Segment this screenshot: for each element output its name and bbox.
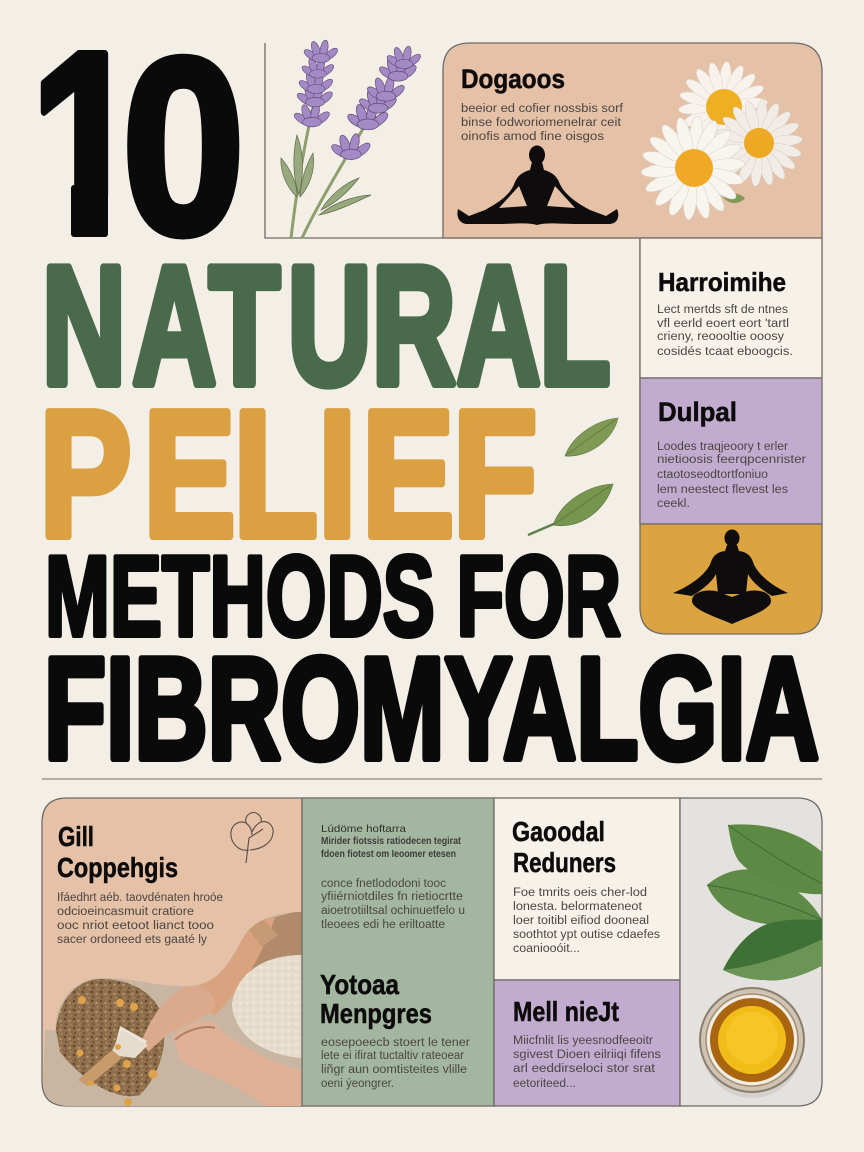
panel text: Miicfnlit lis yeesnodfeeoitr	[513, 1035, 653, 1047]
card heading: Dogaoos	[461, 64, 565, 94]
panel text	[513, 887, 660, 955]
panel text: odcioeincasmuit cratiore	[57, 906, 194, 918]
photo: hands with herbs and heat pack	[42, 905, 304, 1110]
panel text: eetoriteed...	[513, 1078, 576, 1090]
panel heading: Yotoaa	[320, 969, 399, 1000]
icon: leaf outline	[231, 812, 273, 863]
panel text: nietioosis feerqpcenrister	[657, 454, 806, 466]
icon: seated stretch silhouette	[457, 146, 618, 225]
panel text	[513, 1035, 661, 1090]
frame lines top	[265, 43, 640, 524]
paragraph: yfiiérniotdiles fn rietiocrtte	[321, 891, 463, 903]
panel: sage text	[302, 798, 494, 1106]
panel text: lem neestect flevest les	[657, 484, 788, 496]
panel text: liñgr aun oomtisteites vlille	[321, 1064, 467, 1076]
paragraph: conce fnetlododoni tooc	[321, 878, 446, 890]
card text: oinofis amod fine oisgos	[461, 131, 604, 143]
panel text: ceekl.	[657, 498, 690, 510]
panel text: soothtot ypt outise cdaefes	[513, 929, 660, 941]
panel text: loer toitibl eifiod dooneal	[513, 915, 649, 927]
panel text: oeni ýeongrer.	[321, 1078, 394, 1090]
illustration: chamomile daisies	[641, 61, 803, 220]
photo: sage leaves	[707, 824, 825, 980]
card text: binse fodworiomenelrar ceit	[461, 117, 622, 129]
card text	[461, 103, 624, 143]
panel text: eosepoeecb stoert le tener	[321, 1037, 470, 1049]
paragraph	[321, 878, 465, 931]
title: NATURAL: NATURAL	[42, 231, 610, 420]
photo: bowl of oil	[700, 988, 804, 1098]
panel heading: Harroimihe	[658, 267, 786, 297]
intro lines	[321, 823, 462, 860]
panel heading	[320, 969, 432, 1029]
panel: photo of sage leaves and oil	[680, 798, 825, 1106]
panel heading: Gill	[58, 821, 94, 852]
panel heading	[57, 821, 178, 883]
illustration: lavender sprigs	[281, 39, 422, 238]
panel text: ooc nriot eetoot lianct tooo	[57, 920, 214, 932]
panel heading: Gaoodal	[512, 816, 605, 847]
panel text	[321, 1037, 470, 1090]
panel text: Foe tmrits oeis cher-lod	[513, 887, 647, 899]
panel: Gill Coppehgis	[42, 798, 304, 1110]
big number 10: 1	[30, 0, 143, 291]
intro lines: Lúdöme hoftarra	[321, 823, 406, 835]
big number 10: 0	[122, 7, 245, 287]
intro lines: fdoen fiotest om Ieoomer etesen	[321, 849, 456, 860]
panel text: crieny, reoooltie ooosy	[657, 331, 784, 343]
panel heading: Dulpal	[658, 397, 737, 427]
panel text: Ifáedhrt aéb. taovdénaten hroóe	[57, 892, 223, 904]
panel text: Loodes traqjeoory t erler	[657, 441, 788, 453]
intro lines: Mirider fiotssis ratiodecen tegirat	[321, 836, 462, 847]
panel: Mell nieJt	[494, 980, 680, 1106]
panel text: coaniooóit...	[513, 943, 580, 955]
panel: top card	[443, 43, 822, 238]
icon: meditation silhouette	[673, 530, 788, 624]
panel heading	[512, 816, 616, 878]
big number 10	[40, 50, 240, 240]
paragraph: tleoees edi he eriltoatte	[321, 919, 445, 931]
title: METHODS FOR: METHODS FOR	[45, 534, 621, 660]
panel: Harroimihe	[640, 238, 822, 378]
panel text	[57, 892, 223, 946]
panel: Gaoodal Reduners	[494, 798, 680, 980]
panel: Dulpal	[640, 378, 822, 524]
panel heading: Mell nieJt	[513, 996, 619, 1027]
icon: small leaves	[528, 418, 618, 535]
panel text: lonesta. belormateneot	[513, 901, 643, 913]
panel text: lete ei ifirat tuctaltiv rateoear	[321, 1050, 464, 1062]
panel heading: Menpgres	[320, 998, 432, 1029]
panel: meditation	[640, 524, 822, 634]
paragraph: aioetrotiiltsal ochinuetfelo u	[321, 905, 465, 917]
panel heading: Reduners	[513, 847, 616, 878]
panel text: Lect mertds sft de ntnes	[657, 304, 788, 316]
panel text: cosidés tcaat eboogcis.	[657, 346, 793, 358]
panel text: ctaotoseodtortfoniuo	[657, 469, 768, 481]
panel text	[657, 304, 793, 358]
panel text: sacer ordoneed ets gaaté ly	[57, 934, 207, 946]
title: PELIEF: PELIEF	[39, 375, 537, 575]
panel text	[657, 441, 806, 510]
card text: beeior ed cofier nossbis sorf	[461, 103, 624, 115]
panel text: vfl eerld eoert eort 'tartl	[657, 318, 789, 330]
panel heading: Coppehgis	[57, 852, 178, 883]
panel text: sgivest Dioen eilriiqi fifens	[513, 1049, 661, 1061]
panel text: arl eeddirseloci stor srat	[513, 1063, 656, 1075]
